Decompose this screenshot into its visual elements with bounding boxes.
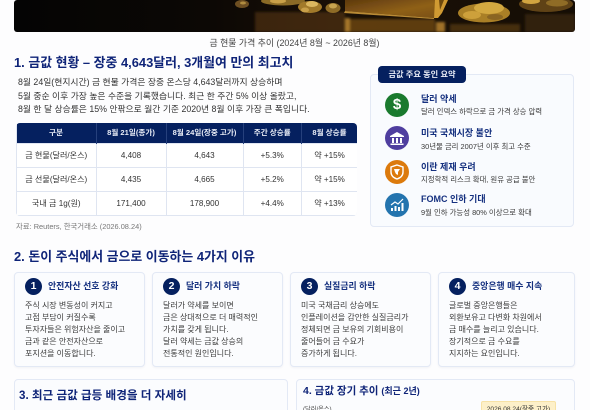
panel heading pill [378,66,466,83]
table: gold prices [16,123,357,216]
heading: section 2: 2. 돈이 주식에서 금으로 이동하는 4가지 이유 [14,248,255,264]
driver 3 title: 이란 제재 우려 [421,162,476,172]
driver 4 title: FOMC 인하 기대 [421,194,486,204]
driver 1 text: 달러 인덱스 하락으로 금 가격 상승 압력 [421,106,542,116]
driver 2 text: 30년물 금리 2007년 이후 최고 수준 [421,142,531,150]
card 3 title: 실질금리 하락 [324,281,375,291]
panel heading pill: 금값 주요 동인 요약 [388,70,456,79]
table: gold prices: 8월 상승률 [312,128,347,137]
card 1 text: 고점 부담이 커질수록 [25,313,96,322]
icon: shield [385,160,409,184]
table: gold prices: 금 선물(달러/온스) [25,175,87,184]
hero caption: 금 현물 가격 추이 (2024년 8월 ~ 2026년 8월) [210,38,380,48]
card 2: dollar decline [152,272,283,367]
table: gold prices: 구분 [49,128,63,137]
panel: section 4 [296,379,575,410]
table: gold prices: +4.4% [261,199,284,208]
number 2: 2 [169,280,174,292]
card 2 text: 전통적인 원인입니다. [163,349,234,358]
table source: 자료: Reuters, 한국거래소 (2026.08.24) [16,222,142,230]
driver 1 title: 달러 약세 [421,94,457,104]
card 4: central banks [438,272,575,367]
table: gold prices: 8월 24일(장중 고가) [173,128,236,137]
number 1 [25,278,42,295]
number 3 [301,278,318,295]
panel: section 3 [14,379,288,410]
card 4 title: 중앙은행 매수 지속 [472,281,542,291]
card 2 text: 달러 약세는 금값 상승의 [163,337,243,346]
number 2 [163,278,180,295]
icon: bank [385,126,409,150]
text: section 1 summary: 8월 24일(현지시간) 금 현물 가격은 장중 온스당 4,643달러까지 상승하며 [18,77,282,87]
card 4 text: 금 매수를 늘리고 있습니다. [449,325,539,334]
card 3 text [301,300,408,358]
icon: dollar [385,93,409,117]
card 1 title: 안전자산 선호 강화 [48,281,118,291]
card 2 title: 달러 가치 하락 [186,281,240,291]
table: gold prices: 주간 상승률 [254,128,291,137]
table: gold prices: 4,643 [194,151,215,160]
icon: dollar: $ [393,96,401,113]
table: gold prices: 4,408 [121,151,141,160]
card 1 text [25,300,125,358]
card 4 text: 지지하는 요인입니다. [449,349,520,358]
card 4 text: 장기적으로 금 수요를 [449,337,520,346]
card 1 text: 투자자들은 위험자산을 줄이고 [25,325,125,334]
heading: section 1: 1. 금값 현황 – 장중 4,643달러, 3개월여 만의 최고치 [14,54,293,70]
heading: section 3: 3. 최근 금값 급등 배경을 더 자세히 [19,388,187,402]
card 1 text: 포지션을 이동합니다. [25,349,96,358]
table: gold prices: +5.2% [261,175,284,184]
card 1 text: 주식 시장 변동성이 커지고 [25,300,113,310]
table: gold prices: 국내 금 1g(원) [32,199,81,208]
chart callout [481,401,556,410]
card 3 text: 인플레이션을 감안한 실질금리가 [301,313,408,322]
card 2 text [163,300,258,358]
card 3: real rates [290,272,431,367]
reflections [255,12,575,32]
table: gold prices: 4,435 [121,175,141,184]
table: gold prices: 금 현물(달러/온스) [25,151,87,160]
card 2 text: 가치를 갖게 됩니다. [163,325,229,334]
table: gold prices: 약 +15% [314,175,345,184]
card 3 text: 미국 국채금리 상승에도 [301,300,379,310]
table: gold prices: 178,900 [190,199,219,208]
card 2 text: 금은 상대적으로 더 매력적인 [163,313,258,322]
card 4 text: 글로벌 중앙은행들은 [449,300,517,310]
number 1: 1 [31,280,36,292]
table: gold prices: +5.3% [261,151,284,160]
table: gold prices: 약 +13% [314,199,345,208]
table: gold prices: 4,665 [194,175,215,184]
panel: key drivers [370,66,574,227]
text: section 1 summary [18,77,310,114]
panel background [370,74,574,227]
table: gold prices: 약 +15% [314,151,345,160]
card 4 text: 외환보유고 다변화 차원에서 [449,313,542,322]
card 1 text: 금과 같은 안전자산으로 [25,337,103,346]
text: section 1 summary: 8월 한 달 상승률은 15% 안팎으로 월간 기준 2020년 8월 이후 가장 큰 폭입니다. [18,104,310,114]
card 1: safe haven [14,272,145,367]
icon: chart [385,193,409,217]
card 2 text: 달러가 약세를 보이면 [163,300,234,310]
driver 4 text: 9월 인하 가능성 80% 이상으로 확대 [421,208,532,216]
card 4 text [449,300,542,358]
driver 3 text: 지정학적 리스크 확대, 원유 공급 불안 [421,174,535,184]
table: gold prices: 8월 21일(종가) [107,128,155,137]
driver 2 title: 미국 국채시장 불안 [421,128,492,138]
card 3 text: 줄어들어 금 수요가 [301,337,364,346]
table: gold prices: 171,400 [116,199,146,208]
card 3 text: 증가하게 됩니다. [301,349,357,358]
card 3 text: 정체되면 금 보유의 기회비용이 [301,325,403,334]
heading: section 4: 4. 금값 장기 추이 (최근 2년) [303,385,420,397]
number 3: 3 [307,280,312,292]
number 4 [449,278,466,295]
number 4: 4 [455,280,460,292]
hero image: gold bars and nuggets [14,0,575,32]
text: section 1 summary: 5월 중순 이후 가장 높은 수준을 기록했습니다. 최근 한 주간 5% 이상 올랐고, [18,90,296,100]
